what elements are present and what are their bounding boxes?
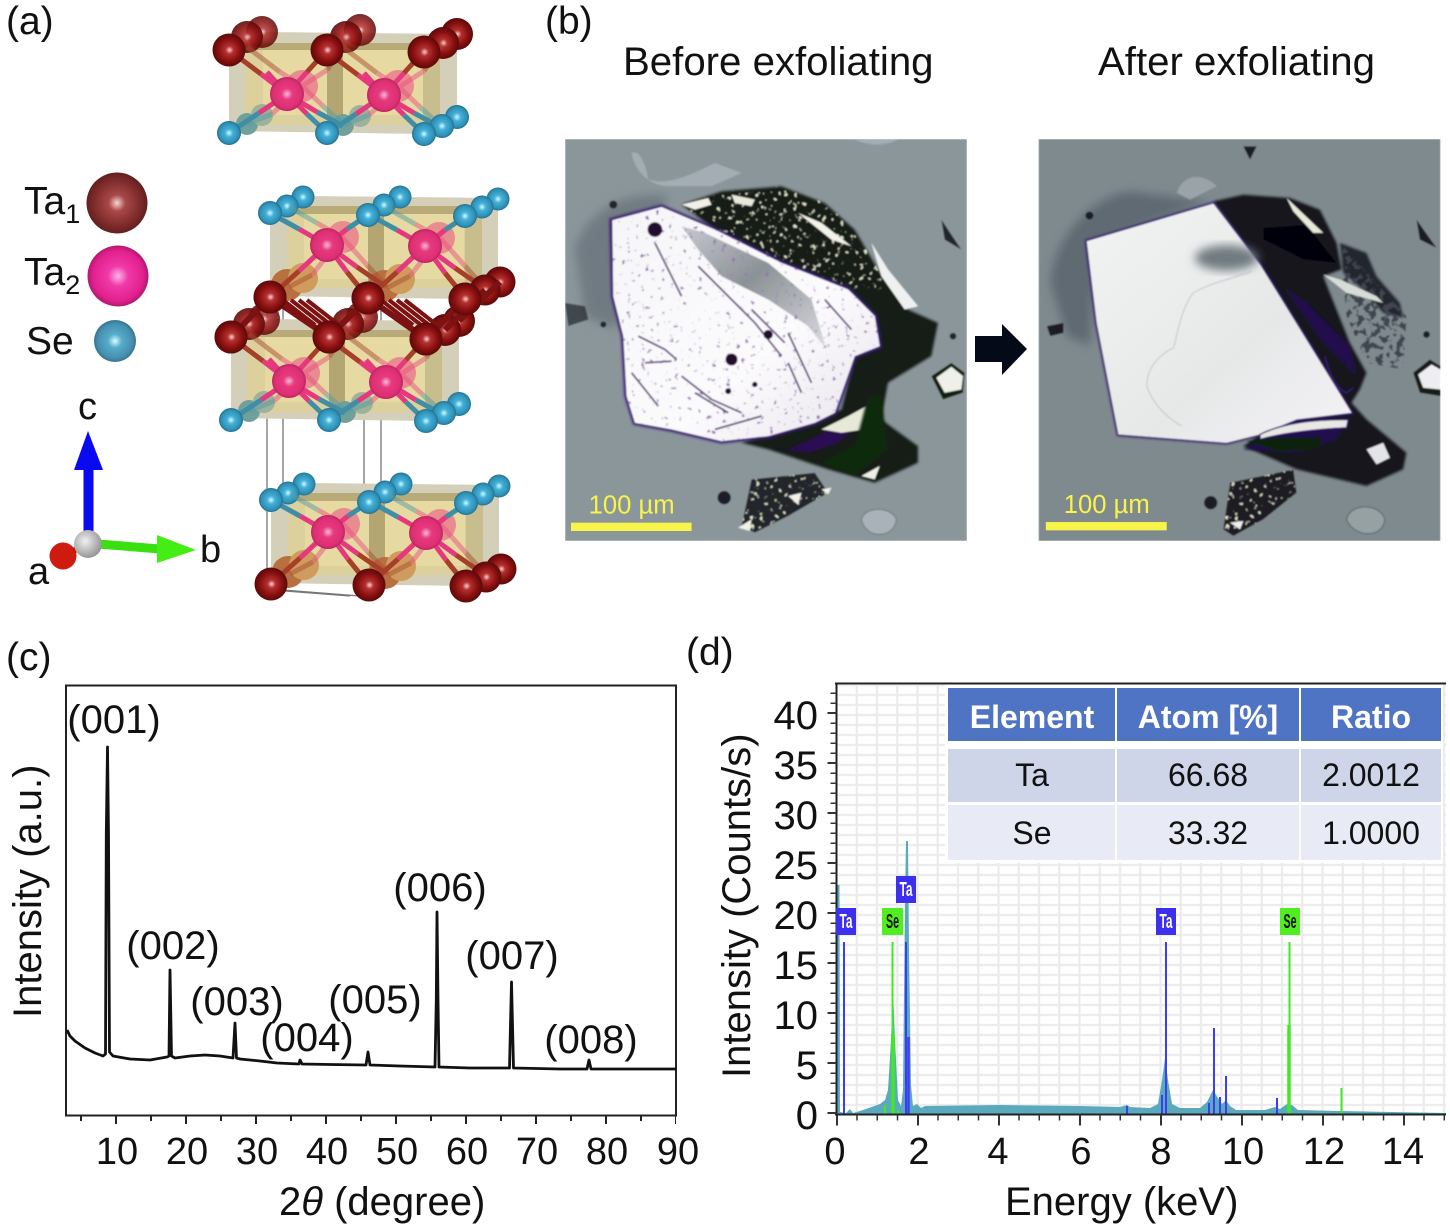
legend: atom types: Ta xyxy=(24,251,65,294)
peak labels: (001) xyxy=(67,698,161,742)
crystal structure: top layer xyxy=(212,14,473,146)
axes xyxy=(835,683,1446,1114)
table: element composition: Ratio xyxy=(1331,699,1411,735)
table: element composition: 2.0012 xyxy=(1322,757,1420,793)
peak labels: (003) xyxy=(190,980,284,1024)
legend: atom types: 2 xyxy=(65,270,80,300)
element lines xyxy=(844,942,1277,1114)
x axis numbers: 40 xyxy=(306,1131,348,1173)
axis triad a b c: a xyxy=(28,551,50,593)
x axis numbers: 8 xyxy=(1150,1131,1172,1173)
crystal structure: Ta-Ta interlayer bonds xyxy=(231,282,500,339)
spectrum area xyxy=(836,841,1446,1114)
legend: atom types: 1 xyxy=(65,199,80,229)
axis ticks xyxy=(832,690,1446,1120)
x axis numbers: 20 xyxy=(166,1131,208,1173)
y axis numbers: 40 xyxy=(774,694,818,738)
y axis numbers xyxy=(774,694,818,1138)
heading: before exfoliating: Before exfoliating xyxy=(623,39,934,84)
peak tags: Ta xyxy=(840,911,853,933)
micrograph: after exfoliating xyxy=(1038,139,1440,541)
panel label (b): (b) xyxy=(545,0,593,43)
redraw atoms over bonds xyxy=(214,280,482,356)
peak labels xyxy=(67,698,638,1062)
table: element composition: 66.68 xyxy=(1168,757,1248,793)
peak tags: Ta xyxy=(900,879,913,901)
axis triad a b c: c xyxy=(78,386,97,428)
x axis title: Energy (keV) xyxy=(1005,1180,1238,1224)
peak tags: Ta xyxy=(1160,911,1173,933)
peak labels: (007) xyxy=(465,934,559,978)
y axis numbers: 30 xyxy=(774,794,818,838)
y axis numbers: 10 xyxy=(774,994,818,1038)
x axis numbers: 12 xyxy=(1303,1131,1345,1173)
peak tags: Se xyxy=(1284,911,1296,933)
y axis numbers: 25 xyxy=(774,844,818,888)
x axis numbers: 80 xyxy=(586,1131,628,1173)
x axis numbers: 0 xyxy=(824,1131,846,1173)
y axis title: Intensity (a.u.) xyxy=(6,765,50,1018)
peak tags: Se xyxy=(886,911,899,933)
y axis numbers: 5 xyxy=(796,1044,818,1088)
arrow: before to after xyxy=(975,324,1027,375)
x axis numbers xyxy=(96,1131,699,1173)
micrograph: before exfoliating xyxy=(565,139,967,541)
XRD curve xyxy=(67,747,676,1069)
crystal structure: unit cell frame xyxy=(267,300,381,596)
y axis title: Intensity (Counts/s) xyxy=(715,733,759,1078)
peak labels: (004) xyxy=(260,1016,354,1060)
x axis numbers: 4 xyxy=(987,1131,1009,1173)
y axis numbers: 15 xyxy=(774,944,818,988)
chart: EDS spectrum xyxy=(715,683,1446,1224)
axis triad a b c xyxy=(28,386,221,593)
grid xyxy=(836,685,1446,1115)
peak tags xyxy=(836,876,1300,935)
x axis numbers: 50 xyxy=(376,1131,418,1173)
table: element composition: 1.0000 xyxy=(1322,815,1420,851)
table: element composition: Ta xyxy=(1015,757,1049,793)
y axis numbers: 20 xyxy=(774,894,818,938)
x axis numbers xyxy=(824,1131,1424,1173)
x axis numbers: 70 xyxy=(516,1131,558,1173)
legend: atom types: Ta xyxy=(24,180,65,223)
peak labels: (006) xyxy=(393,866,487,910)
peak labels: (008) xyxy=(544,1018,638,1062)
plot frame xyxy=(66,686,676,1116)
heading: after exfoliating: After exfoliating xyxy=(1098,39,1375,84)
x axis numbers: 30 xyxy=(236,1131,278,1173)
micrograph: after exfoliating: 100 µm xyxy=(1064,491,1150,519)
panel label (c): (c) xyxy=(6,636,51,679)
chart: XRD pattern xyxy=(6,686,699,1224)
crystal structure: second layer xyxy=(254,186,516,316)
x axis numbers: 14 xyxy=(1382,1131,1424,1173)
table: element composition: 33.32 xyxy=(1168,815,1248,851)
x axis numbers: 10 xyxy=(1222,1131,1264,1173)
x axis numbers: 90 xyxy=(657,1131,699,1173)
x axis numbers: 60 xyxy=(446,1131,488,1173)
table: element composition: Atom [%] xyxy=(1138,699,1278,735)
table: element composition: Element xyxy=(970,699,1095,735)
x axis title: 2θ (degree) xyxy=(279,1180,485,1224)
y axis numbers: 0 xyxy=(796,1094,818,1138)
legend: atom types: Se xyxy=(26,320,74,363)
crystal structure: bottom layer xyxy=(254,472,516,602)
crystal structure: third layer xyxy=(214,301,475,433)
panel label (a): (a) xyxy=(6,0,54,43)
x axis numbers: 6 xyxy=(1070,1131,1092,1173)
table: element composition xyxy=(945,685,1443,863)
x axis numbers: 2 xyxy=(908,1131,930,1173)
axis triad a b c: b xyxy=(200,529,221,571)
y axis numbers: 35 xyxy=(774,744,818,788)
peak labels: (005) xyxy=(328,978,422,1022)
axis ticks xyxy=(80,1118,676,1120)
micrograph: before exfoliating: 100 µm xyxy=(589,492,675,520)
panel label (d): (d) xyxy=(686,631,734,674)
table: element composition: Se xyxy=(1012,815,1052,851)
peak labels: (002) xyxy=(126,924,220,968)
legend: atom types xyxy=(24,172,148,363)
x axis numbers: 10 xyxy=(96,1131,138,1173)
